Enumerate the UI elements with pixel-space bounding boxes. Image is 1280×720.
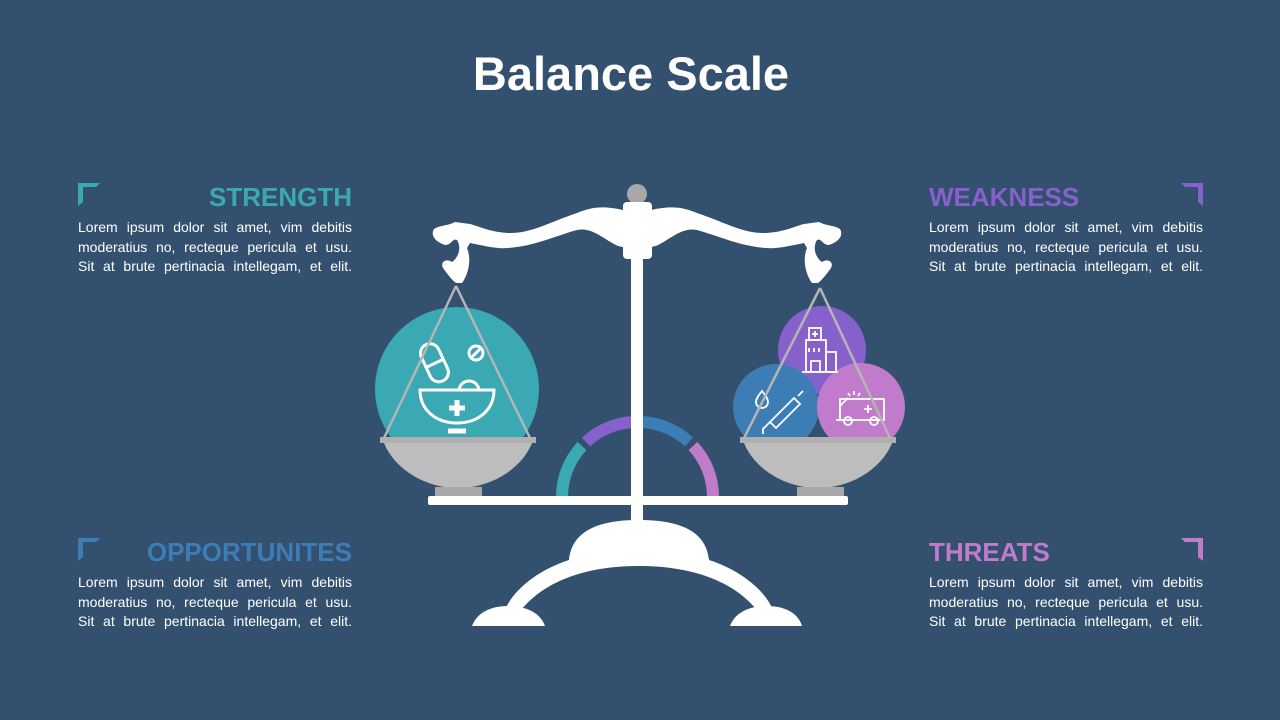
title: Balance Scale <box>473 47 789 100</box>
panel: weakness <box>929 182 1203 274</box>
heading: strength: STRENGTH <box>209 182 352 212</box>
text: weakness: Lorem ipsum dolor sit amet, vim debitis <box>929 219 1203 235</box>
corner marks <box>78 183 1203 561</box>
text: threats: Sit at brute pertinacia intellegam, et elit. <box>929 613 1203 629</box>
panel: strength <box>78 182 352 274</box>
text: strength: Lorem ipsum dolor sit amet, vim debitis <box>78 219 352 235</box>
text: strength <box>78 219 352 274</box>
heading: threats: THREATS <box>929 537 1050 567</box>
text: weakness: Sit at brute pertinacia intellegam, et elit. <box>929 258 1203 274</box>
left pan with icon <box>375 286 539 496</box>
text: strength: moderatius no, recteque pericula et usu. <box>78 238 352 254</box>
heading: weakness: WEAKNESS <box>929 182 1079 212</box>
text: strength: Sit at brute pertinacia intellegam, et elit. <box>78 258 352 274</box>
base <box>472 520 802 626</box>
text: opportunities <box>78 574 352 629</box>
text: weakness <box>929 219 1203 274</box>
text: threats: moderatius no, recteque pericula et usu. <box>929 594 1203 610</box>
panel: opportunities <box>78 537 352 629</box>
heading: opportunities: OPPORTUNITES <box>147 537 352 567</box>
text: opportunities: Sit at brute pertinacia intellegam, et elit. <box>78 613 352 629</box>
panel: threats <box>929 537 1203 629</box>
text: weakness: moderatius no, recteque pericula et usu. <box>929 238 1203 254</box>
text: opportunities: moderatius no, recteque pericula et usu. <box>78 594 352 610</box>
arc segments <box>562 422 713 497</box>
text: opportunities: Lorem ipsum dolor sit amet, vim debitis <box>78 574 352 590</box>
text: threats: Lorem ipsum dolor sit amet, vim debitis <box>929 574 1203 590</box>
icon: mortar and pills <box>417 341 494 431</box>
icons: hospital, syringe, ambulance <box>756 328 884 434</box>
text: threats <box>929 574 1203 629</box>
post and beam <box>428 184 848 522</box>
right pan with icons <box>733 288 905 496</box>
